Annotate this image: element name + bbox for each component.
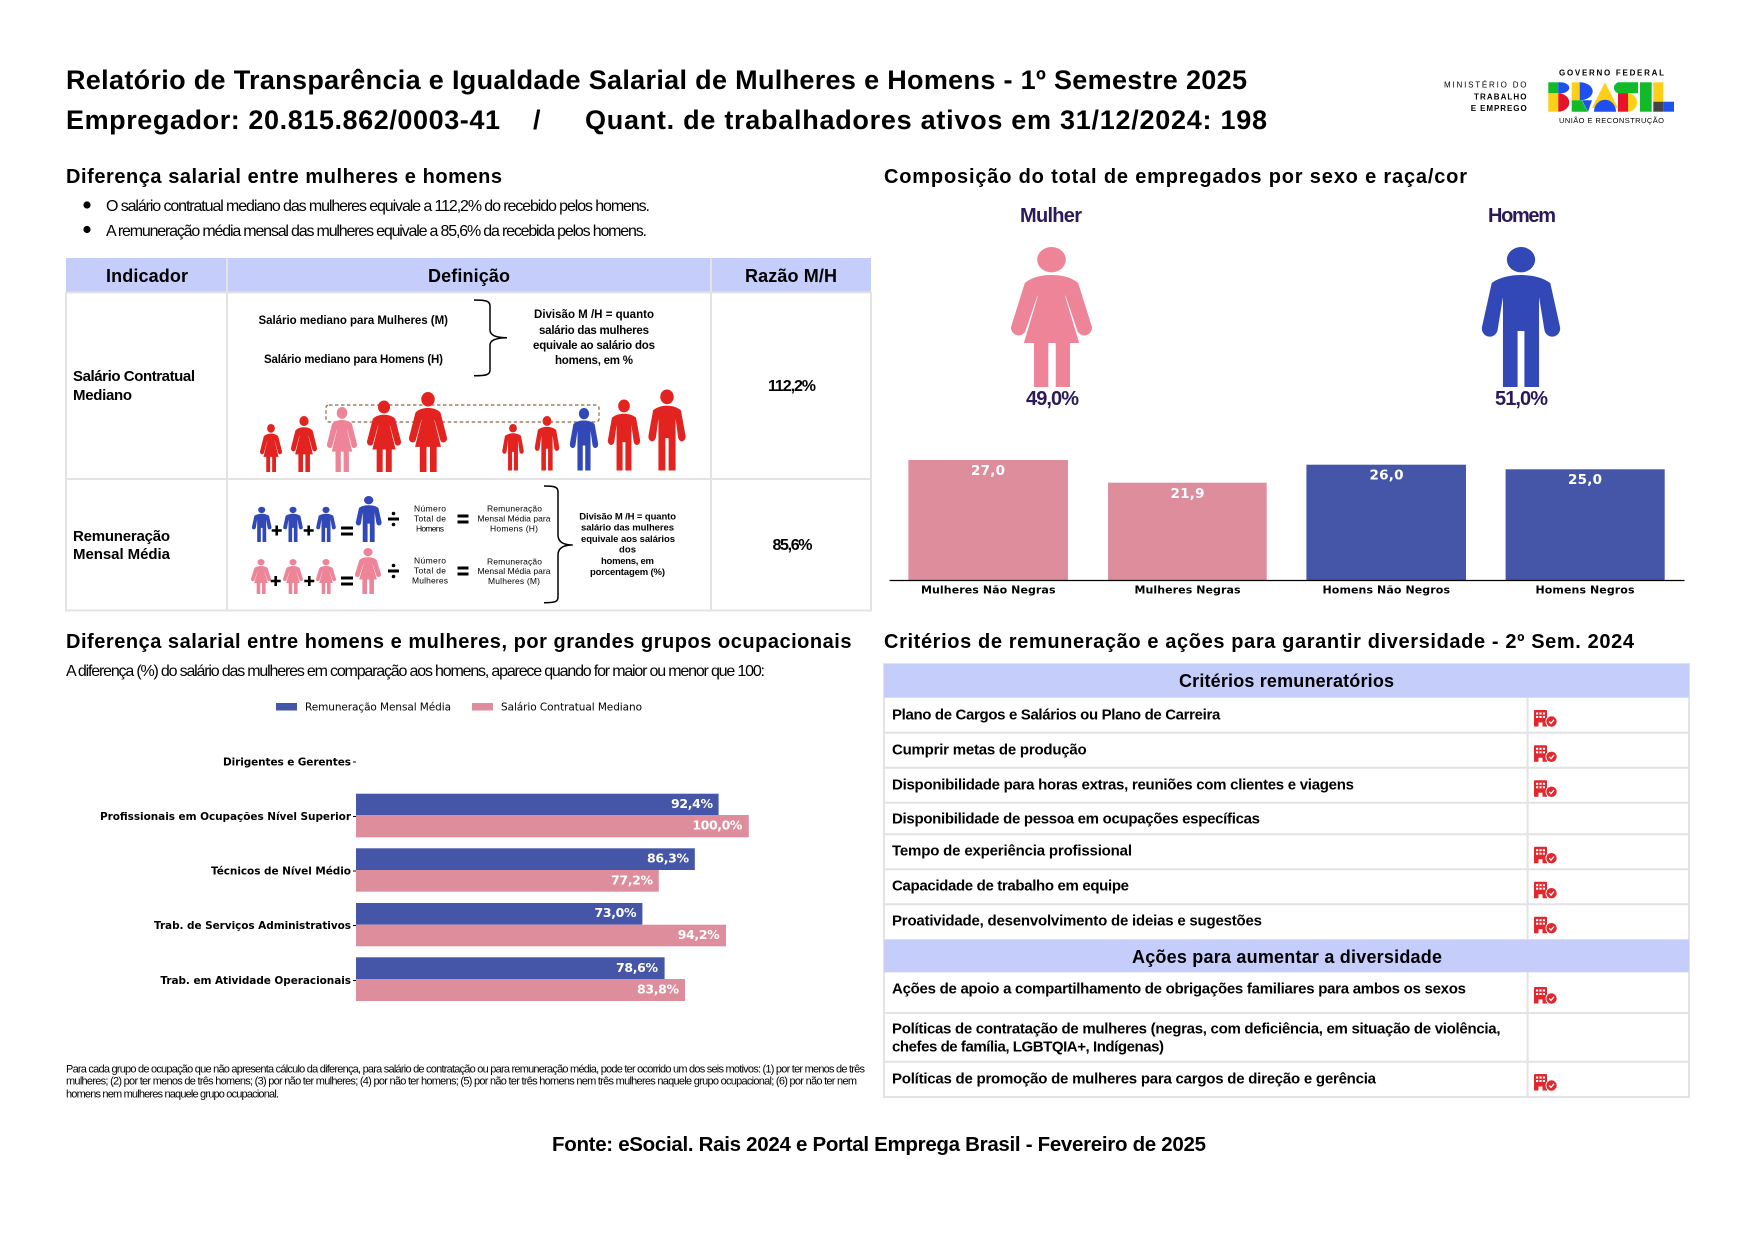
text: remuneração homens: Homens (H) [490, 524, 538, 534]
subtitle: A diferença (%) do salário das mulheres em comparação aos homens, aparece quando for maior ou menor que 100: [66, 663, 765, 680]
text: número total de homens [414, 504, 446, 534]
bar chart: composição por raça/cor: Mulheres Não Negras [921, 584, 1056, 596]
explanation: divisão M/H [533, 309, 655, 367]
table header: Definição [428, 266, 510, 286]
bar chart: composição por raça/cor: Homens Negros [1536, 584, 1635, 596]
row label: remuneração mensal média: Mensal Média [73, 546, 171, 563]
icons: formula homens [252, 496, 468, 542]
icons: people in order of salary [260, 390, 686, 472]
definition text: salário mediano: Salário mediano para Homens (H) [264, 354, 443, 366]
row label: salário contratual mediano: Salário Contratual [73, 368, 195, 385]
icons: building check, ações [1534, 987, 1558, 1092]
text: remuneração mulheres [478, 557, 551, 586]
bar chart: composição por raça/cor: 26,0 [1370, 467, 1404, 483]
dashed median highlight [326, 405, 599, 422]
brace [544, 486, 573, 603]
bar chart: grupos ocupacionais: 86,3% [647, 850, 689, 866]
bullets: A remuneração média mensal das mulheres equivale a 85,6% da recebida pelos homens. [106, 223, 647, 240]
explanation: divisão M/H: homens, em [601, 556, 654, 567]
explanation: divisão M/H: homens, em % [555, 355, 633, 367]
panel: homem: Homem [1488, 205, 1556, 227]
explanation: divisão M/H: equivale aos salários [581, 534, 675, 545]
panel: homem: 51,0% [1495, 388, 1548, 410]
explanation: divisão M/H: equivale ao salário dos [533, 340, 655, 352]
action rows: Políticas de contratação de mulheres (negras, com deficiência, em situação de violência, [892, 1020, 1500, 1037]
bar chart: grupos ocupacionais [100, 756, 749, 1001]
criteria rows: Disponibilidade para horas extras, reuniões com clientes e viagens [892, 776, 1354, 793]
explanation: divisão M/H: Divisão M /H = quanto [534, 309, 654, 321]
criteria rows: Proatividade, desenvolvimento de ideias e sugestões [892, 912, 1262, 929]
action rows [892, 980, 1500, 1087]
text: remuneração homens [478, 504, 551, 534]
explanation: divisão M/H: salário das mulheres [539, 325, 649, 337]
footnote: Para cada grupo de ocupação que não apresenta cálculo da diferença, para salário de contratação ou para remuneração média, pode ter ocorrido um dos seis motivos: (1) por ter menos de três [66, 1064, 865, 1076]
title: Empregador: 20.815.862/0003-41 [66, 105, 500, 135]
bar chart: composição por raça/cor: 27,0 [971, 463, 1005, 479]
table header: Razão M/H [745, 266, 837, 286]
bar chart: grupos ocupacionais: 83,8% [637, 982, 679, 996]
panel: mulher: Mulher [1020, 205, 1082, 227]
text: remuneração mulheres: Mensal Média para [478, 566, 551, 576]
bar chart: grupos ocupacionais: 94,2% [678, 927, 720, 942]
panel: mulher [1011, 205, 1092, 410]
bar chart: composição por raça/cor: 25,0 [1568, 472, 1602, 488]
bar chart: composição por raça/cor: 21,9 [1170, 486, 1204, 502]
bar chart: grupos ocupacionais: 100,0% [692, 818, 743, 832]
panel: mulher: 49,0% [1026, 388, 1079, 410]
text: número total de mulheres: Número [414, 556, 446, 566]
legend [276, 702, 642, 714]
bullets [83, 198, 650, 240]
footnote: homens nem mulheres naquele grupo ocupacional. [66, 1088, 279, 1100]
row label: salário contratual mediano: Mediano [73, 387, 132, 404]
icons: formula mulheres [251, 548, 468, 594]
footnote: mulheres; (2) por ter menos de três homens; (3) por não ter mulheres; (4) por não ter homens; (5) por não ter três homens nem três mulheres naquele grupo ocupacional; (6) por não ter nem [66, 1076, 857, 1088]
text: remuneração mulheres: Remuneração [487, 557, 542, 567]
panel: tabela de indicadores [66, 258, 871, 611]
logo: ministério e governo federal [1444, 68, 1674, 125]
legend: Salário Contratual Mediano [501, 702, 642, 714]
text: número total de homens: Total de [414, 514, 446, 524]
category labels: Profissionais em Ocupações Nível Superior [100, 811, 352, 823]
header: critérios remuneratórios: Critérios remuneratórios [1179, 671, 1394, 691]
heading: critérios: Critérios de remuneração e ações para garantir diversidade - 2º Sem. 2024 [884, 631, 1635, 653]
bullets: O salário contratual mediano das mulheres equivale a 112,2% do recebido pelos homens. [106, 198, 650, 215]
bar chart: grupos ocupacionais: 78,6% [616, 960, 658, 975]
value: 85,6%: 85,6% [772, 537, 812, 554]
title: Relatório de Transparência e Igualdade Salarial de Mulheres e Homens - 1º Semestre 2025 [66, 65, 1247, 95]
action rows: Políticas de promoção de mulheres para cargos de direção e gerência [892, 1070, 1377, 1087]
criteria rows: Capacidade de trabalho em equipe [892, 877, 1129, 894]
legend: Remuneração Mensal Média [305, 702, 451, 714]
explanation: divisão M/H: porcentagem (%) [590, 567, 665, 578]
row label: remuneração mensal média [73, 528, 171, 563]
bar chart: composição por raça/cor: Mulheres Negras [1134, 584, 1241, 596]
text: remuneração homens: Mensal Média para [478, 514, 551, 524]
bar chart: grupos ocupacionais: 92,4% [671, 796, 713, 811]
definition text: salário mediano [258, 315, 448, 366]
criteria rows: Disponibilidade de pessoa em ocupações específicas [892, 811, 1260, 828]
logo: ministério e governo federal: GOVERNO FEDERAL [1559, 68, 1664, 77]
panel: homem [1482, 205, 1560, 410]
panel: tabela de critérios [884, 664, 1689, 1097]
heading: composição: Composição do total de empregados por sexo e raça/cor [884, 166, 1467, 188]
explanation: divisão M/H [579, 511, 676, 578]
heading: diferença por grupos ocupacionais: Diferença salarial entre homens e mulheres, por grandes grupos ocupacionais [66, 631, 852, 653]
source: Fonte: eSocial. Rais 2024 e Portal Emprega Brasil - Fevereiro de 2025 [552, 1133, 1206, 1156]
category labels: Técnicos de Nível Médio [211, 866, 351, 878]
icons: building check, critérios [1534, 710, 1558, 934]
row label: remuneração mensal média: Remuneração [73, 528, 170, 545]
logo: ministério e governo federal: TRABALHO [1474, 92, 1526, 101]
text: número total de homens: Homens [416, 524, 444, 534]
criteria rows: Cumprir metas de produção [892, 741, 1087, 758]
logo: ministério e governo federal: MINISTÉRIO DO [1444, 80, 1526, 89]
explanation: divisão M/H: dos [619, 545, 636, 556]
bar chart: grupos ocupacionais: 77,2% [611, 872, 653, 888]
text: número total de mulheres: Mulheres [412, 576, 448, 586]
criteria rows: Tempo de experiência profissional [892, 842, 1132, 859]
category labels: Trab. em Atividade Operacionais [160, 975, 351, 987]
explanation: divisão M/H: salário das mulheres [581, 523, 674, 534]
bar chart: composição por raça/cor [890, 460, 1684, 596]
action rows: Ações de apoio a compartilhamento de obrigações familiares para ambos os sexos [892, 980, 1466, 998]
header: ações para aumentar a diversidade: Ações para aumentar a diversidade [1132, 947, 1442, 967]
value: 112,2%: 112,2% [768, 378, 816, 395]
action rows: chefes de família, LGBTQIA+, Indígenas) [892, 1039, 1164, 1056]
text: número total de mulheres [412, 556, 448, 586]
footnote [66, 1064, 865, 1100]
row label: salário contratual mediano [73, 368, 195, 404]
category labels: Trab. de Serviços Administrativos [154, 920, 351, 932]
logo: ministério e governo federal: E EMPREGO [1471, 104, 1527, 113]
definition text: salário mediano: Salário mediano para Mulheres (M) [258, 315, 448, 327]
text: número total de mulheres: Total de [414, 566, 446, 576]
text: remuneração homens: Remuneração [487, 504, 542, 514]
bar chart: composição por raça/cor: Homens Não Negros [1322, 584, 1450, 596]
logo: ministério e governo federal: UNIÃO E RECONSTRUÇÃO [1559, 116, 1664, 125]
criteria rows: Plano de Cargos e Salários ou Plano de Carreira [892, 706, 1221, 723]
bar chart: grupos ocupacionais: 73,0% [594, 905, 637, 920]
explanation: divisão M/H: Divisão M /H = quanto [579, 511, 676, 522]
title: Quant. de trabalhadores ativos em 31/12/2024: 198 [585, 105, 1267, 135]
title [66, 65, 1267, 135]
criteria rows [892, 706, 1354, 929]
text: remuneração mulheres: Mulheres (M) [488, 576, 540, 586]
category labels: Dirigentes e Gerentes [223, 756, 351, 768]
category labels [100, 756, 356, 987]
table header [106, 266, 837, 286]
heading: diferença salarial: Diferença salarial entre mulheres e homens [66, 166, 502, 188]
table header: Indicador [106, 266, 188, 286]
title: / [533, 105, 541, 135]
text: número total de homens: Número [414, 504, 446, 514]
brace [474, 300, 507, 376]
